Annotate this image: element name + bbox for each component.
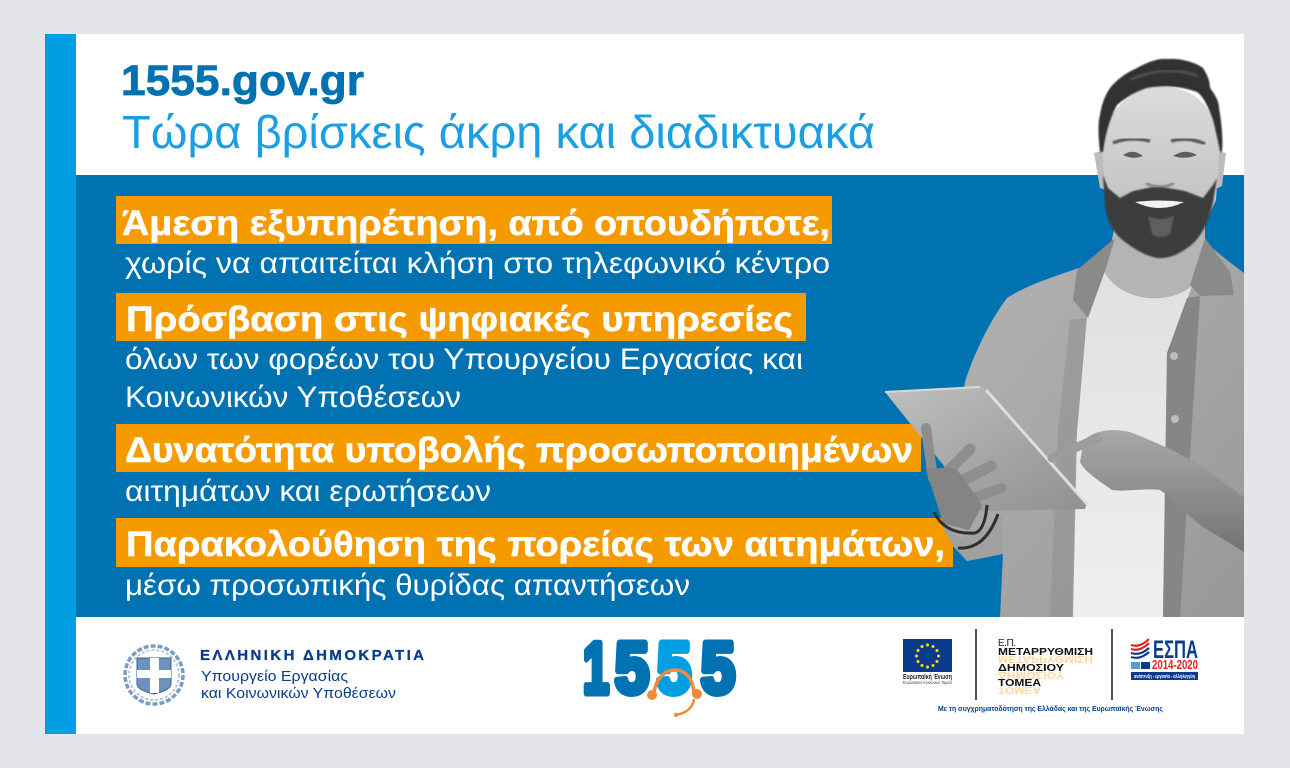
logo digits: 5 <box>701 629 735 709</box>
icon: ESPA waves <box>1131 639 1149 658</box>
ears <box>1094 151 1226 190</box>
programme name: ΤΟΜΕΑ <box>998 677 1041 689</box>
description 3: αιτημάτων και ερωτήσεων <box>125 475 491 508</box>
smile <box>1135 200 1184 208</box>
sleeve cuff <box>941 524 1003 561</box>
benefit 2 <box>116 293 806 414</box>
EU flag <box>903 639 952 672</box>
ESPA wordmark: ΕΣΠΑ <box>1153 636 1198 664</box>
eyebrows <box>1113 139 1205 144</box>
reflections <box>998 653 1093 696</box>
left accent stripe <box>45 34 76 734</box>
subtitle: Τώρα βρίσκεις άκρη και διαδικτυακά <box>122 106 875 158</box>
benefit 3 <box>116 424 921 508</box>
footer: public sector reform logo <box>998 638 1093 696</box>
collar <box>1073 238 1234 318</box>
footer: ESPA logo <box>1131 636 1198 680</box>
logo digits: 1 <box>583 629 609 709</box>
heading 2: Πρόσβαση στις ψηφιακές υπηρεσίες <box>126 300 793 339</box>
button <box>1171 415 1179 423</box>
description 1: χωρίς να απαιτείται κλήση στο τηλεφωνικό κέντρο <box>125 247 830 280</box>
programme name <box>998 646 1093 689</box>
chin patch <box>1148 216 1174 237</box>
blue content panel <box>76 175 1244 617</box>
EU label: Ευρωπαϊκή Ένωση <box>903 674 952 681</box>
face <box>1102 86 1220 220</box>
logo digits <box>583 629 735 709</box>
republic name: ΕΛΛΗΝΙΚΗ ΔΗΜΟΚΡΑΤΙΑ <box>200 647 424 664</box>
description 2: Κοινωνικών Υποθέσεων <box>125 381 461 414</box>
flags <box>1131 662 1150 669</box>
benefit 4 <box>116 518 953 602</box>
beard <box>1103 175 1217 258</box>
t-shirt <box>1073 272 1192 617</box>
pointing arm and hand <box>1080 430 1244 552</box>
orange highlight 2 <box>116 293 806 341</box>
tagline: ανάπτυξη - εργασία - αλληλεγγύη <box>1134 674 1195 680</box>
footer: Hellenic Republic logo <box>125 646 424 704</box>
shirt <box>945 238 1244 617</box>
heading 3: Δυνατότητα υποβολής προσωποποιημένων <box>125 431 913 470</box>
divider left <box>975 629 977 700</box>
co-funding statement: Με τη συγχρηματοδότηση της Ελλάδας και της Ευρωπαϊκής Ένωσης <box>938 705 1163 713</box>
description 2: όλων των φορέων του Υπουργείου Εργασίας και <box>125 343 803 376</box>
footer: EU logo <box>903 639 952 685</box>
reflections: ΔΗΜΟΣΙΟΥ <box>998 669 1064 681</box>
holding hand <box>926 428 1002 528</box>
period: 2014-2020 <box>1152 657 1198 672</box>
pointing finger <box>1052 438 1098 458</box>
heading 4: Παρακολούθηση της πορείας των αιτημάτων, <box>126 525 945 564</box>
programme label: Ε.Π. <box>998 638 1016 649</box>
heading 1: Άμεση εξυπηρέτηση, από οπουδήποτε, <box>122 204 830 243</box>
neck <box>1105 225 1205 298</box>
logo digits: 5 <box>615 629 649 709</box>
benefit 1 <box>116 196 832 280</box>
nose shadow <box>1146 183 1174 187</box>
orange highlight 1 <box>116 196 832 244</box>
description 2 <box>125 343 803 414</box>
title: 1555.gov.gr: 1555.gov.gr <box>121 57 364 105</box>
icon: headset <box>647 670 702 717</box>
wrist bands <box>934 505 998 548</box>
description 4: μέσω προσωπικής θυρίδας απαντήσεων <box>125 569 690 602</box>
programme name: ΜΕΤΑΡΡΥΘΜΙΣΗ <box>998 646 1093 658</box>
orange highlight 4 <box>116 518 953 567</box>
reflections: ΤΟΜΕΑ <box>998 684 1041 696</box>
tagline bar <box>1131 672 1198 680</box>
eyes <box>1123 152 1197 158</box>
shirt fold shading <box>1050 318 1088 617</box>
divider right <box>1111 629 1113 700</box>
icon: coat of arms wreath <box>125 646 183 704</box>
hair <box>1098 59 1222 152</box>
photo: smiling man with tablet <box>885 59 1244 617</box>
fund label: Ευρωπαϊκό Κοινωνικό Ταμείο <box>903 679 952 685</box>
programme name: ΔΗΜΟΣΙΟΥ <box>998 662 1064 674</box>
logo digits: 5 <box>657 629 691 709</box>
tablet <box>885 387 1087 511</box>
title block <box>121 57 875 158</box>
button <box>1170 352 1178 360</box>
placket <box>1163 296 1200 617</box>
orange highlight 3 <box>116 424 921 472</box>
reflections: ΜΕΤΑΡΡΥΘΜΙΣΗ <box>998 653 1093 665</box>
ministry line 2: και Κοινωνικών Υποθέσεων <box>201 685 396 702</box>
ministry line 1: Υπουργείο Εργασίας <box>201 668 348 685</box>
hair highlight <box>1130 71 1198 80</box>
footer: 1555 logo <box>583 629 735 717</box>
